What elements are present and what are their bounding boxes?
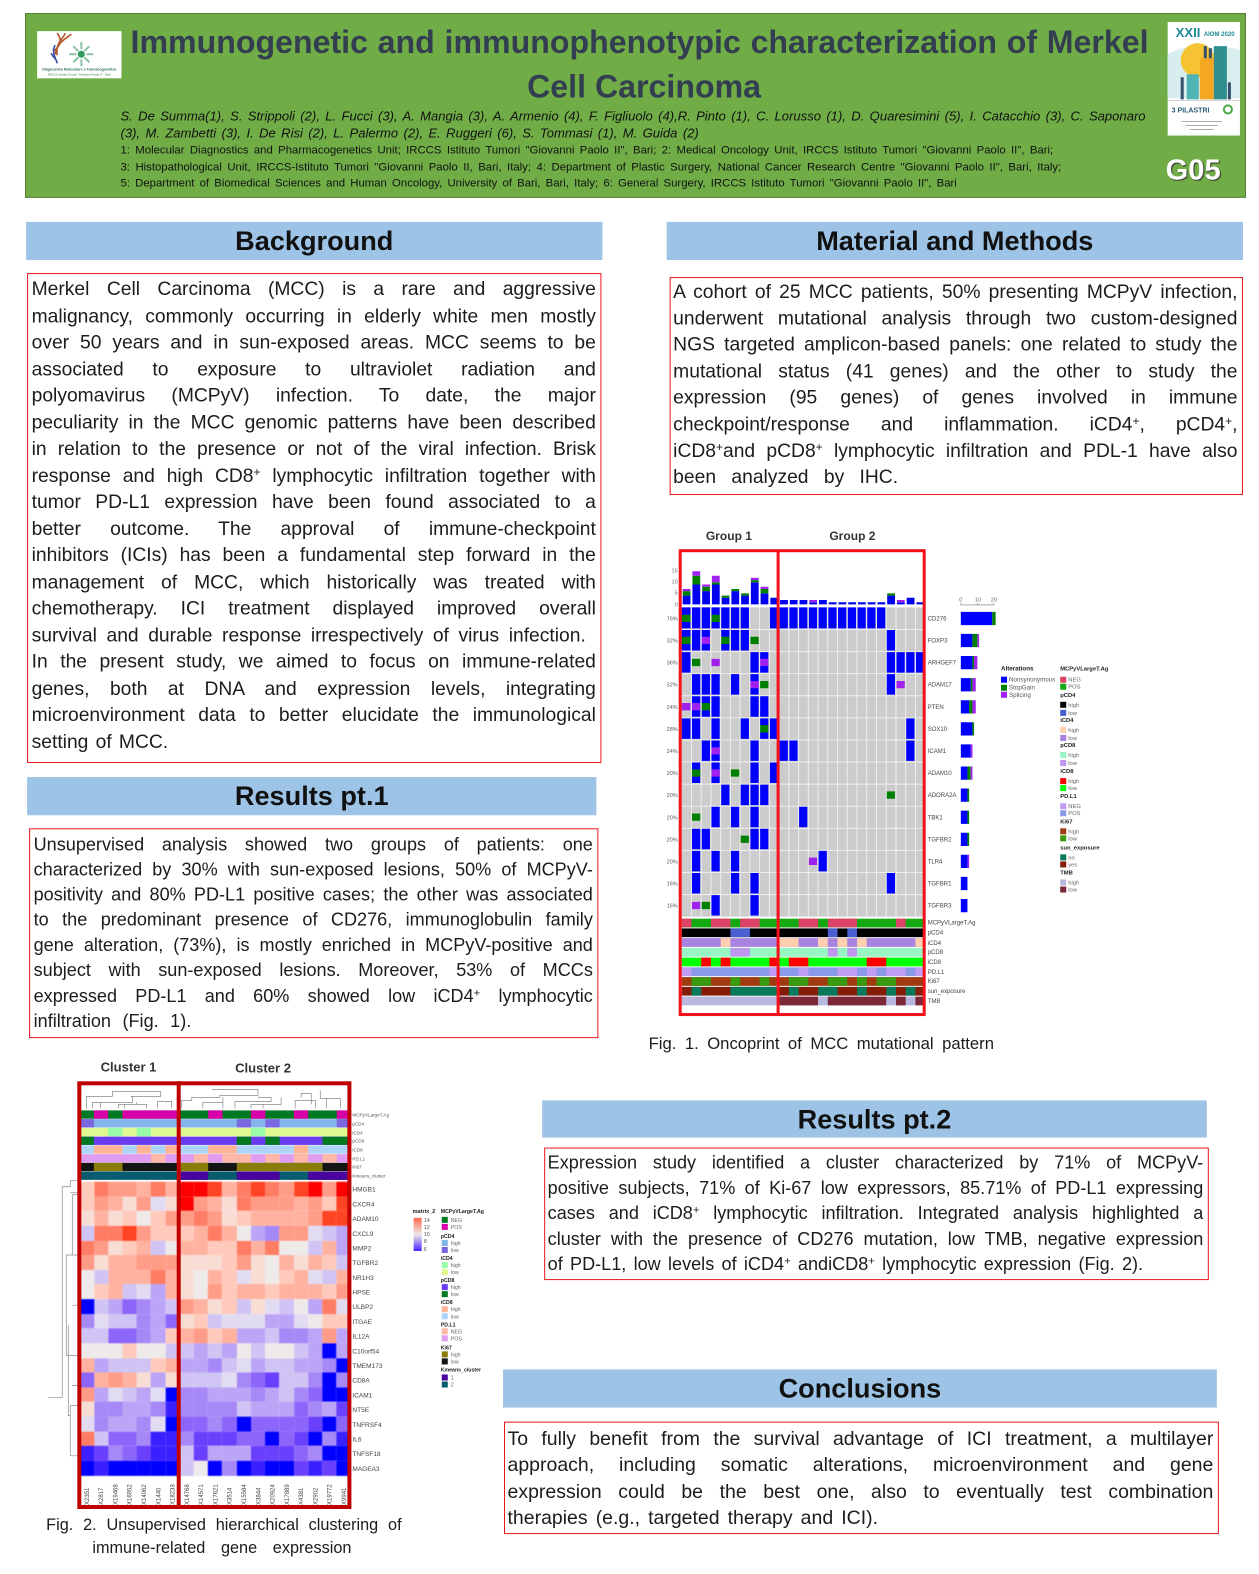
annotation track labels: pCD8 [352, 1139, 365, 1144]
text block: background: associated to exposure to ultraviolet radiation and [32, 359, 596, 380]
annotation track labels: pCD8 [928, 950, 944, 956]
sample labels: X3514 [228, 1487, 234, 1505]
text block: results pt.2: of PD-L1, low levels of iCD4+ andiCD8+ lymphocytic expression (Fig. 2). [548, 1254, 1143, 1274]
text block: results pt.1: characterized by 30% with sun-exposed lesions, 50% of MCPyV- [34, 860, 593, 880]
sample labels: X3844 [256, 1487, 262, 1505]
gene labels: TGFBR2 [352, 1260, 378, 1267]
gene labels: ITGAE [352, 1319, 373, 1326]
heading: material and methods: Material and Methods [816, 226, 1093, 256]
legend: clinical annotations [1060, 667, 1109, 894]
annotation track labels: PD.L1 [352, 1157, 366, 1162]
row dendrogram [48, 1181, 78, 1456]
sample labels: X14768 [185, 1484, 191, 1505]
logo: molecular diagnostics unit [37, 31, 121, 78]
title: Immunogenetic and immunophenotypic characterization of Merkel [131, 24, 1149, 60]
panel: results pt.1 [27, 777, 598, 1038]
percent labels: 28% [667, 727, 678, 733]
text block: background: chemotherapy. ICI treatment displayed improved overall [32, 598, 596, 619]
logo: molecular diagnostics unit: IRCCS Istituto Tumori "Giovanni Paolo II" - Bari [48, 72, 111, 76]
legend: clinical annotations: POS [1068, 811, 1081, 817]
cluster labels: Cluster 1 [101, 1059, 156, 1074]
group labels: Group 1 [706, 529, 752, 543]
sample labels: X17889 [285, 1484, 291, 1505]
top stacked bars: 0 [675, 602, 678, 608]
legend: alterations: Alterations [1001, 666, 1034, 673]
text block: background: polyomavirus (MCPyV) infection. To date, the major [32, 386, 596, 407]
panel: conclusions [503, 1369, 1219, 1534]
sample labels: X20924 [271, 1484, 277, 1505]
annotation track labels: Ki67 [928, 979, 940, 985]
text block: results pt.1 [29, 828, 598, 1038]
text block: material and methods: checkpoint/response and inflammation. iCD4+, pCD4+, [673, 413, 1237, 435]
gene labels: CXCL9 [352, 1231, 374, 1238]
text block: results pt.1: to the predominant presence of CD276, immunoglobulin family [34, 910, 593, 930]
legend: clinical annotations: high [1068, 728, 1079, 734]
legend: annotations: MCPyVLargeT.Ag [441, 1209, 484, 1215]
percent labels: 16% [667, 882, 678, 888]
annotation track labels: Kmeans_cluster [352, 1174, 386, 1179]
text block: material and methods: mutational status (41 genes) and the other to study the [673, 361, 1237, 382]
legend: colour scale: 8 [424, 1239, 427, 1245]
text block: results pt.2: cluster with the presence of CD276 mutation, low TMB, negative expression [548, 1229, 1203, 1249]
percent labels: 76% [667, 616, 678, 622]
legend: clinical annotations: TMB [1060, 870, 1073, 876]
heading: results pt.2 [542, 1100, 1207, 1138]
text block: conclusions: expression could be the best one, also to eventually test combination [508, 1481, 1213, 1503]
gene labels [352, 1187, 383, 1473]
affiliations [120, 145, 1061, 190]
legend: alterations: StopGain [1009, 685, 1035, 692]
text block: results pt.1: expressed PD-L1 and 60% showed low iCD4+ lymphocytic [34, 985, 593, 1006]
congress poster thumbnail [1168, 22, 1240, 136]
gene labels: TGFBR2 [928, 837, 952, 843]
heatmap matrix [81, 1180, 348, 1477]
legend: annotations: 1 [451, 1375, 454, 1381]
legend: alterations: Nonsynonymous [1009, 677, 1055, 684]
annotation track labels [928, 921, 976, 1005]
legend: clinical annotations: iCD4 [1060, 718, 1074, 724]
annotation track labels: pCD4 [352, 1121, 365, 1126]
legend: annotations: 2 [451, 1383, 454, 1389]
gene labels: CD8A [352, 1378, 370, 1385]
caption: figure 2 [46, 1516, 402, 1557]
annotation track labels: MCPyVLargeT.Ag [928, 921, 976, 927]
legend: clinical annotations: low [1068, 836, 1078, 842]
gene labels: FOXP3 [928, 639, 948, 645]
poster code G05: G05 [1166, 155, 1221, 187]
legend: annotations: low [451, 1314, 459, 1320]
text block: results pt.2 [544, 1148, 1209, 1280]
sample labels: X19772 [328, 1484, 334, 1505]
text block: background: in relation to the presence or not of the viral infection. Brisk [32, 439, 596, 460]
text block: results pt.1: positivity and 80% PD-L1 positive cases; the other was associated [34, 885, 593, 905]
sample labels: X2817 [99, 1487, 105, 1505]
gene labels: C10orf54 [352, 1348, 380, 1355]
gene labels: TLR4 [928, 859, 943, 865]
text block: background [27, 273, 601, 763]
authors [120, 108, 1146, 141]
gene labels: MMP2 [352, 1245, 372, 1252]
legend: clinical annotations: iCD8 [1060, 769, 1074, 775]
congress poster thumbnail: AIOM 2020 [1204, 32, 1235, 38]
annotation track labels: pCD4 [928, 931, 944, 937]
text block: background: microenvironment data to better elucidate the immunological [32, 705, 596, 726]
text block: results pt.2: cases and iCD8+ lymphocytic infiltration. Integrated analysis highlighted a [548, 1203, 1203, 1223]
sample labels: X16952 [128, 1484, 134, 1505]
gene labels: IL12A [352, 1334, 370, 1341]
gene labels: MAGEA3 [352, 1466, 380, 1473]
gene labels: IL6 [352, 1436, 362, 1443]
text block: background: tumor PD-L1 expression have been found associated to a [32, 492, 596, 513]
cluster labels [101, 1059, 291, 1075]
gene labels: CD276 [928, 616, 947, 622]
congress poster thumbnail: 3 PILASTRI [1172, 107, 1210, 114]
legend: annotations: Kmeans_cluster [441, 1367, 481, 1373]
heading: background [26, 222, 602, 260]
text block: results pt.2: Expression study identified a cluster characterized by 71% of MCPyV- [548, 1153, 1203, 1173]
panel: results pt.2 [542, 1100, 1209, 1280]
legend: annotations: PD.L1 [441, 1322, 456, 1328]
legend: annotations: NEG [451, 1218, 462, 1224]
cluster labels: Cluster 2 [235, 1060, 291, 1075]
gene labels: ADORA2A [928, 793, 956, 799]
text block: background: peculiarity in the MCC genomic patterns have been described [32, 412, 596, 433]
legend: clinical annotations: yes [1068, 862, 1077, 868]
sample labels: X4381 [299, 1487, 305, 1505]
gene labels: TNFRSF4 [352, 1422, 382, 1429]
sample labels: X9941 [342, 1487, 348, 1505]
annotation track labels: sun_exposure [928, 989, 966, 995]
gene labels: SOX10 [928, 727, 948, 733]
header banner [25, 13, 1246, 198]
percent labels: 32% [667, 639, 678, 645]
legend: annotations: high [451, 1352, 461, 1358]
text block: background: genes, both at DNA and expression levels, integrating [32, 678, 596, 699]
legend: colour scale: 6 [424, 1247, 427, 1253]
authors: S. De Summa(1), S. Strippoli (2), L. Fucci (3), A. Mangia (3), A. Armenio (4), F. Figliuolo (4),R. Pinto (1), C. Lorusso (1), D. Quaresimini (5), I. Catacchio (3), C. Saponaro [120, 108, 1146, 123]
sample labels [85, 1484, 348, 1505]
red cluster boxes [77, 1081, 351, 1509]
text block: material and methods: iCD8+and pCD8+ lymphocytic infiltration and PDL-1 have also [673, 440, 1237, 462]
legend: clinical annotations: no [1068, 855, 1075, 861]
gene labels: TNFSF18 [352, 1451, 381, 1458]
right side alteration bars: 10 [975, 597, 981, 603]
authors: (3), M. Zambetti (3), I. De Risi (2), L. Palermo (2), E. Ruggeri (6), S. Tommasi (1), M. Guida (2) [120, 125, 699, 141]
group labels: Group 2 [829, 529, 876, 543]
congress poster thumbnail: XXII [1176, 25, 1200, 40]
heading: material and methods [667, 222, 1243, 260]
annotation track labels: iCD4 [928, 941, 942, 947]
legend: clinical annotations: high [1068, 779, 1079, 785]
gene labels: ULBP2 [352, 1304, 373, 1311]
caption: figure 2: immune-related gene expression [92, 1539, 351, 1557]
sample labels: X14571 [199, 1484, 205, 1505]
gene labels: ICAM1 [352, 1392, 373, 1399]
text block: background: survival and durable response irrespectively of virus infection. [32, 625, 586, 646]
clinical annotation tracks [682, 919, 925, 1005]
legend: clinical annotations: low [1068, 888, 1078, 894]
legend: clinical annotations: Ki67 [1060, 819, 1073, 825]
legend: clinical annotations: high [1068, 829, 1079, 835]
legend: clinical annotations: NEG [1068, 678, 1081, 684]
gene labels: ADAM10 [352, 1216, 379, 1223]
gene labels: HPSE [352, 1290, 371, 1297]
panel: background [26, 222, 602, 764]
text block: material and methods: expression (95 genes) of genes involved in immune [673, 388, 1237, 409]
legend: clinical annotations: pCD8 [1060, 743, 1076, 749]
text block: results pt.1: gene alteration, (73%), is mostly enriched in MCPyV-positive and [34, 935, 593, 955]
legend: clinical annotations: high [1068, 703, 1079, 709]
text block: material and methods: been analyzed by IHC. [673, 467, 898, 488]
caption: figure 2: Fig. 2. Unsupervised hierarchical clustering of [46, 1516, 402, 1534]
legend: annotations: high [451, 1285, 461, 1291]
gene labels: ICAM1 [928, 749, 947, 755]
column dendrogram [86, 1089, 340, 1108]
text block: background: over 50 years and in sun-exposed areas. MCC seems to be [32, 332, 596, 353]
legend: annotations [441, 1209, 484, 1389]
annotation track labels: iCD4 [352, 1131, 363, 1136]
figure 1: oncoprint [666, 529, 1109, 1016]
gene labels: NT5E [352, 1407, 370, 1414]
text block: background: malignancy, commonly occurring in elderly white men mostly [32, 306, 596, 327]
percent labels: 16% [667, 904, 678, 910]
figure 2: expression heatmap [48, 1059, 484, 1510]
affiliations: 3: Histopathological Unit, IRCCS-Istituto Tumori "Giovanni Paolo II, Bari, Italy; 4: Department of Plastic Surgery, National Cancer Research Centre "Giovanni Paolo II", Bari, Italy; [120, 161, 1061, 173]
text block: background: better outcome. The approval of immune-checkpoint [32, 519, 596, 540]
legend: annotations: high [451, 1263, 461, 1269]
legend: clinical annotations: MCPyVLargeT.Ag [1060, 667, 1109, 673]
legend: annotations: Ki67 [441, 1345, 452, 1351]
gene labels: CXCR4 [352, 1201, 375, 1208]
panel: material and methods [666, 222, 1243, 495]
legend: annotations: POS [451, 1225, 462, 1231]
percent labels: 20% [667, 837, 678, 843]
percent labels [667, 616, 678, 910]
legend: colour scale: matrix_2 [413, 1209, 435, 1215]
legend: annotations: high [451, 1307, 461, 1313]
gene labels [928, 616, 957, 910]
gene labels: ARHGEF7 [928, 661, 957, 667]
legend: clinical annotations: pCD4 [1060, 693, 1076, 699]
mutation matrix [682, 607, 925, 917]
text block: conclusions: To fully benefit from the survival advantage of ICI treatment, a multilayer [508, 1427, 1213, 1450]
legend: annotations: iCD4 [441, 1256, 453, 1262]
top stacked bars [672, 568, 924, 608]
text block: background: management of MCC, which historically was treated with [32, 572, 596, 593]
gene labels: ADAM10 [928, 771, 952, 777]
affiliations: 5: Department of Biomedical Sciences and Human Oncology, University of Bari, Bari, Italy; 6: General Surgery, IRCCS Istituto Tumori "Giovanni Paolo II", Bari [120, 178, 957, 190]
text block: background: setting of MCC. [32, 731, 168, 752]
text block: background: Merkel Cell Carcinoma (MCC) is a rare and aggressive [32, 279, 596, 300]
percent labels: 32% [667, 683, 678, 689]
text block: background: In the present study, we aimed to focus on immune-related [32, 652, 596, 673]
sample annotation tracks [80, 1110, 351, 1180]
legend: annotations: NEG [451, 1329, 462, 1335]
top stacked bars: 15 [672, 568, 678, 574]
text block: conclusions: therapies (e.g., targeted therapy and ICI). [508, 1507, 878, 1529]
sample labels: X2351 [85, 1487, 91, 1505]
legend: clinical annotations: low [1068, 736, 1078, 742]
gene labels: TGFBR3 [928, 904, 952, 910]
legend: annotations: low [451, 1359, 459, 1365]
sample labels: X1440 [156, 1487, 162, 1505]
legend: annotations: POS [451, 1336, 462, 1342]
heading: results pt.2: Results pt.2 [798, 1104, 951, 1135]
percent labels: 20% [667, 815, 678, 821]
legend: colour scale [413, 1209, 435, 1253]
legend: annotations: pCD8 [441, 1278, 454, 1284]
annotation track labels: Ki67 [352, 1165, 362, 1170]
right side alteration bars: 20 [991, 597, 997, 603]
text block: material and methods: A cohort of 25 MCC patients, 50% presenting MCPyV infection, [673, 282, 1237, 303]
gene labels: TBK1 [928, 815, 943, 821]
gene labels: HMGB1 [352, 1187, 376, 1194]
sample labels: X19468 [113, 1484, 119, 1505]
legend: clinical annotations: POS [1068, 685, 1081, 691]
legend: clinical annotations: sun_exposure [1060, 845, 1100, 851]
affiliations: 1: Molecular Diagnostics and Pharmacogenetics Unit; IRCCS Istituto Tumori "Giovanni Paolo II", Bari; 2: Medical Oncology Unit, IRCCS Istituto Tumori "Giovanni Paolo II", Bari; [120, 145, 1053, 157]
legend: colour scale: 14 [424, 1218, 430, 1224]
text block: material and methods: NGS targeted amplicon-based panels: one related to study the [673, 335, 1237, 356]
text block: material and methods [670, 277, 1243, 495]
percent labels: 36% [667, 661, 678, 667]
text block: background: response and high CD8+ lymphocytic infiltration together with [32, 464, 596, 486]
title [131, 24, 1149, 104]
legend: clinical annotations: low [1068, 711, 1078, 717]
gene labels: ADAM17 [928, 683, 952, 689]
legend: colour scale: 10 [424, 1232, 430, 1238]
sample labels: X17621 [213, 1484, 219, 1505]
heading: results pt.1 [27, 777, 596, 815]
annotation track labels: iCD8 [928, 960, 942, 966]
text block: results pt.1: Unsupervised analysis showed two groups of patients: one [34, 834, 593, 854]
legend: clinical annotations: low [1068, 761, 1078, 767]
group labels [706, 529, 876, 543]
red group boxes [680, 551, 924, 1015]
heading: results pt.1: Results pt.1 [235, 781, 389, 811]
legend: clinical annotations: PD.L1 [1060, 794, 1077, 800]
text block: results pt.2: positive subjects, 71% of Ki-67 low expressors, 85.71% of PD-L1 expressing [548, 1178, 1203, 1198]
annotation track labels: iCD8 [352, 1148, 363, 1153]
logo: molecular diagnostics unit: Diagnostica Molecolare e Farmacogenetica [42, 67, 117, 71]
heading: background: Background [235, 226, 393, 256]
top stacked bars: 5 [675, 590, 678, 596]
annotation track labels: TMB [928, 999, 940, 1005]
legend: alterations: Splicing [1009, 692, 1031, 699]
legend: annotations: high [451, 1241, 461, 1247]
sample labels: X18233 [171, 1484, 177, 1505]
gene labels: PTEN [928, 705, 944, 711]
legend: colour scale: 12 [424, 1225, 430, 1231]
percent labels: 20% [667, 771, 678, 777]
percent labels: 24% [667, 705, 678, 711]
sample labels: X2902 [313, 1487, 319, 1505]
top stacked bars: 10 [672, 579, 678, 585]
heading: conclusions [503, 1369, 1217, 1408]
annotation track labels: PD.L1 [928, 970, 945, 976]
legend: annotations: low [451, 1270, 459, 1276]
gene labels: TMEM173 [352, 1363, 383, 1370]
percent labels: 20% [667, 859, 678, 865]
gene labels: TGFBR1 [928, 882, 952, 888]
gene labels: NR1H3 [352, 1275, 374, 1282]
percent labels: 24% [667, 749, 678, 755]
legend: clinical annotations: high [1068, 881, 1079, 887]
title: Cell Carcinoma [527, 68, 761, 104]
legend: clinical annotations: low [1068, 786, 1078, 792]
sample labels: X15584 [242, 1484, 248, 1505]
text block: conclusions: approach, including somatic alterations, microenvironment and gene [508, 1454, 1213, 1476]
text block: background: inhibitors (ICIs) has been a fundamental step forward in the [32, 545, 596, 566]
text block: results pt.1: infiltration (Fig. 1). [34, 1011, 191, 1031]
legend: annotations: iCD8 [441, 1300, 453, 1306]
legend: clinical annotations: NEG [1068, 804, 1081, 810]
sample labels: X14062 [142, 1484, 148, 1505]
annotation track labels: MCPyVLargeT.Ag [352, 1112, 389, 1117]
legend: annotations: low [451, 1248, 459, 1254]
right side alteration bars: 0 [959, 597, 962, 603]
legend: clinical annotations: high [1068, 753, 1079, 759]
legend: alterations [1001, 666, 1055, 699]
annotation track labels [352, 1112, 389, 1179]
caption: figure 1: Fig. 1. Oncoprint of MCC mutational pattern [649, 1034, 994, 1053]
percent labels: 20% [667, 793, 678, 799]
legend: annotations: pCD4 [441, 1234, 454, 1240]
heading: conclusions: Conclusions [779, 1373, 941, 1404]
legend: annotations: low [451, 1292, 459, 1298]
text block: results pt.1: subject with sun-exposed lesions. Moreover, 53% of MCCs [34, 960, 593, 980]
right side alteration bars [959, 597, 997, 912]
text block: conclusions [504, 1422, 1219, 1534]
text block: material and methods: underwent mutational analysis through two custom-designed [673, 308, 1237, 329]
